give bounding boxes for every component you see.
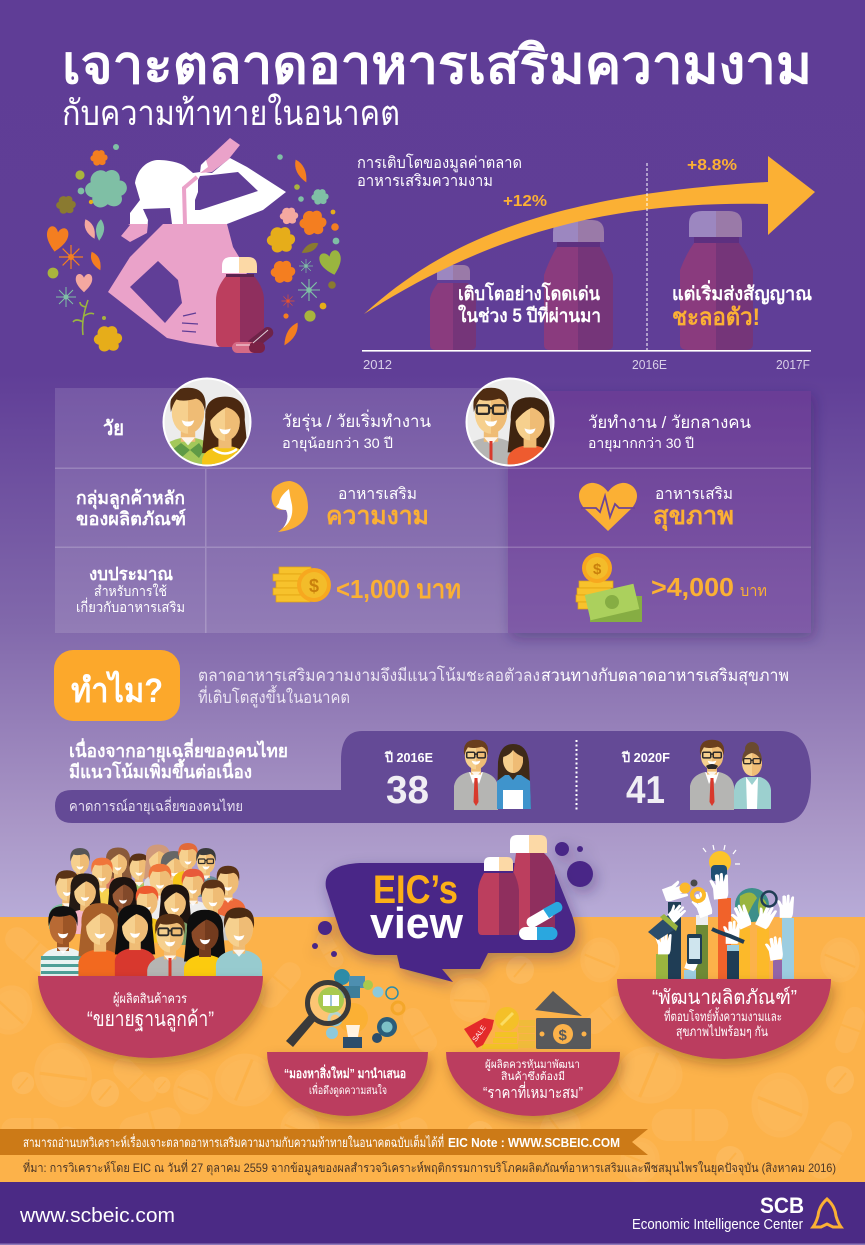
SCB wordmark: SCB: [760, 1193, 804, 1218]
bowl: develop products: ที่ตอบโจทย์ทั้งความงามและ: [664, 1007, 782, 1024]
axis labels: 2012: [363, 357, 392, 372]
caption left: เติบโตอย่างโดดเด่น: [458, 282, 600, 305]
why explanation: สวนทางกับตลาดอาหารเสริมสุขภาพ: [541, 666, 789, 686]
view label: view: [370, 899, 464, 948]
2016E stat: 38: [386, 769, 429, 812]
beauty label: อาหารเสริม: [338, 486, 417, 503]
why badge: ทำไม?: [71, 670, 163, 710]
health label: [653, 486, 734, 532]
beauty label: [326, 486, 429, 530]
2016E stat: ปี 2016E: [384, 750, 433, 765]
growth labels: +12%: [503, 193, 547, 210]
coin and gears: [680, 880, 704, 901]
phone: [687, 934, 702, 964]
icon: coins and banknotes: [576, 553, 642, 622]
bowl: right price: ผู้ผลิตควรหันมาพัฒนา: [485, 1059, 580, 1071]
dots: [312, 842, 593, 957]
bowl: develop products: [617, 979, 831, 1059]
light bulb: [703, 845, 740, 881]
bowl: expand customer base: “ขยายฐานลูกค้า”: [87, 1008, 214, 1032]
center name: Economic Intelligence Center: [632, 1216, 803, 1233]
row labels: เกี่ยวกับอาหารเสริม: [76, 598, 185, 615]
reason heading: มีแนวโน้มเพิ่มขึ้นต่อเนื่อง: [69, 758, 252, 782]
bowl: develop products: สุขภาพไปพร้อมๆ กัน: [676, 1024, 768, 1040]
bowl: right price: [446, 1052, 620, 1116]
2020F stat: [621, 750, 670, 812]
bottles: [478, 835, 555, 935]
row dividers: [55, 468, 811, 633]
right panel: [508, 391, 811, 633]
woman silhouette upper: [130, 158, 286, 224]
ribbon: read more: สามารถอ่านบทวิเคราะห์เรื่องเจาะตลาดอาหารเสริมความงามกับความท้าทายในอนาคตฉบับเต็มได้ที่: [23, 1133, 444, 1150]
icon: woman profile: [272, 481, 308, 532]
bowl: seek new things: [267, 1052, 428, 1116]
avatar: working couple: [466, 378, 554, 466]
bottle 2017F: [680, 211, 753, 350]
icon: sale tag coins and money: SALE: [472, 1024, 488, 1043]
capsules: [232, 325, 276, 353]
capsules: [519, 902, 562, 940]
drink bottle held at mouth: [200, 138, 240, 173]
orange section: [0, 917, 865, 1184]
icon: magnifier and bulb: [286, 969, 404, 1048]
reason heading: [69, 738, 288, 782]
axis labels: 2016E: [632, 357, 667, 372]
why explanation: [198, 665, 789, 708]
chart: market growth: [357, 153, 815, 372]
caption left: [458, 282, 601, 327]
bottle 2016E: [544, 220, 613, 350]
people 2016E: [454, 740, 531, 810]
icon: coins: [273, 567, 331, 602]
bottle 2012: [430, 265, 476, 350]
divider 2016E: [646, 163, 648, 351]
beauty label: ความงาม: [326, 502, 429, 530]
reason heading: เนื่องจากอายุเฉลี่ยของคนไทย: [69, 738, 288, 763]
comparison table: [55, 378, 811, 633]
why explanation: ที่เติบโตสูงขึ้นในอนาคต: [198, 685, 350, 708]
average age panel: [55, 731, 811, 823]
icon: coins: $: [309, 576, 319, 596]
health label: สุขภาพ: [653, 502, 734, 532]
budget right: [651, 572, 767, 602]
budget right: >4,000: [651, 572, 734, 602]
age group text right: [588, 413, 751, 452]
fingers: [182, 313, 198, 332]
supplement bottle: [216, 257, 264, 347]
2020F stat: 41: [626, 769, 665, 812]
straw: [184, 177, 197, 224]
arms: [656, 898, 794, 979]
axis labels: [363, 357, 810, 372]
bowl: seek new things: “มองหาสิ่งใหม่” มานำเสนอ: [284, 1064, 406, 1081]
globe: [735, 888, 769, 922]
chart title: [357, 153, 522, 190]
axis line: [362, 350, 811, 352]
forecast label: คาดการณ์อายุเฉลี่ยของคนไทย: [69, 797, 243, 815]
hands: [656, 872, 794, 972]
logo: bell: [813, 1199, 841, 1227]
ribbon: read more: [0, 1129, 648, 1155]
age group text right: วัยทำงาน / วัยกลางคน: [588, 413, 751, 432]
why badge: [54, 650, 180, 721]
growth arrow: [364, 156, 815, 314]
icon: sale tag coins and money: [464, 991, 591, 1049]
divider dots: [576, 740, 578, 811]
age group text left: [282, 409, 431, 452]
panel shape: [55, 731, 811, 823]
caption right: [672, 280, 812, 331]
budget left: <1,000 บาท: [336, 574, 461, 604]
EIC's label: EIC’s: [373, 868, 458, 912]
age group text left: วัยรุ่น / วัยเริ่มทำงาน: [282, 409, 431, 432]
chart title: การเติบโตของมูลค่าตลาด: [357, 153, 522, 173]
age group text left: อายุน้อยกว่า 30 ปี: [282, 435, 393, 452]
icon: coins and banknotes: $: [593, 561, 602, 578]
woman silhouette lower: [108, 224, 247, 347]
bowl: right price: สินค้าซึ่งต้องมี: [501, 1068, 565, 1083]
main heading: เจาะตลาดอาหารเสริมความงาม: [62, 36, 812, 95]
chart title: อาหารเสริมความงาม: [357, 173, 493, 190]
icon: hands with tools: [648, 845, 794, 979]
row labels: สำหรับการใช้: [94, 583, 167, 599]
row labels: วัย: [103, 418, 124, 440]
2016E stat: [384, 750, 433, 812]
health label: อาหารเสริม: [655, 486, 733, 503]
crowd of customers: [40, 843, 262, 988]
2020F stat: ปี 2020F: [621, 750, 670, 765]
bowl: expand customer base: ผู้ผลิตสินค้าควร: [113, 991, 187, 1007]
icon: heart pulse: [579, 483, 637, 531]
age group text right: อายุมากกว่า 30 ปี: [588, 435, 694, 452]
website: www.scbeic.com: [19, 1205, 175, 1227]
bowl: develop products: “พัฒนาผลิตภัณฑ์”: [652, 986, 797, 1009]
subtitle: กับความท้าทายในอนาคต: [62, 93, 400, 133]
row labels: กลุ่มลูกค้าหลัก: [76, 488, 185, 510]
icon: sale tag coins and money: $: [558, 1027, 568, 1044]
magnifier: [762, 892, 776, 906]
caption right: ชะลอตัว!: [672, 304, 760, 331]
row labels: งบประมาณ: [89, 564, 173, 584]
budget right: บาท: [740, 583, 767, 600]
axis labels: 2017F: [776, 357, 810, 372]
bowl: seek new things: เพื่อดึงดูดความสนใจ: [309, 1082, 387, 1097]
avatar: young couple: [162, 378, 252, 466]
caption left: ในช่วง 5 ปีที่ผ่านมา: [458, 302, 601, 327]
EIC view bubble: [312, 835, 593, 982]
front row: [40, 903, 262, 976]
bowl: right price: “ราคาที่เหมาะสม”: [483, 1081, 583, 1102]
ribbon: read more: EIC Note : WWW.SCBEIC.COM: [448, 1135, 620, 1150]
growth labels: +8.8%: [687, 157, 737, 174]
megaphone: [648, 914, 678, 940]
why explanation: ตลาดอาหารเสริมความงามจึงมีแนวโน้มชะลอตัวลง: [198, 665, 540, 685]
growth labels: [503, 157, 737, 210]
people 2020F: [690, 740, 771, 810]
caption right: แต่เริ่มส่งสัญญาณ: [672, 280, 812, 305]
footer: [0, 1182, 865, 1245]
bowl: expand customer base: [38, 976, 263, 1058]
illustration: woman drinking: [44, 138, 345, 353]
ponytail tip: [121, 224, 148, 242]
decorative flowers: [44, 144, 345, 351]
left panel: [55, 388, 508, 633]
row labels: [76, 418, 186, 615]
bubble shape: [326, 863, 575, 982]
wrench: [712, 929, 744, 942]
row labels: ของผลิตภัณฑ์: [76, 508, 186, 529]
faded pill pattern: [0, 922, 865, 1184]
